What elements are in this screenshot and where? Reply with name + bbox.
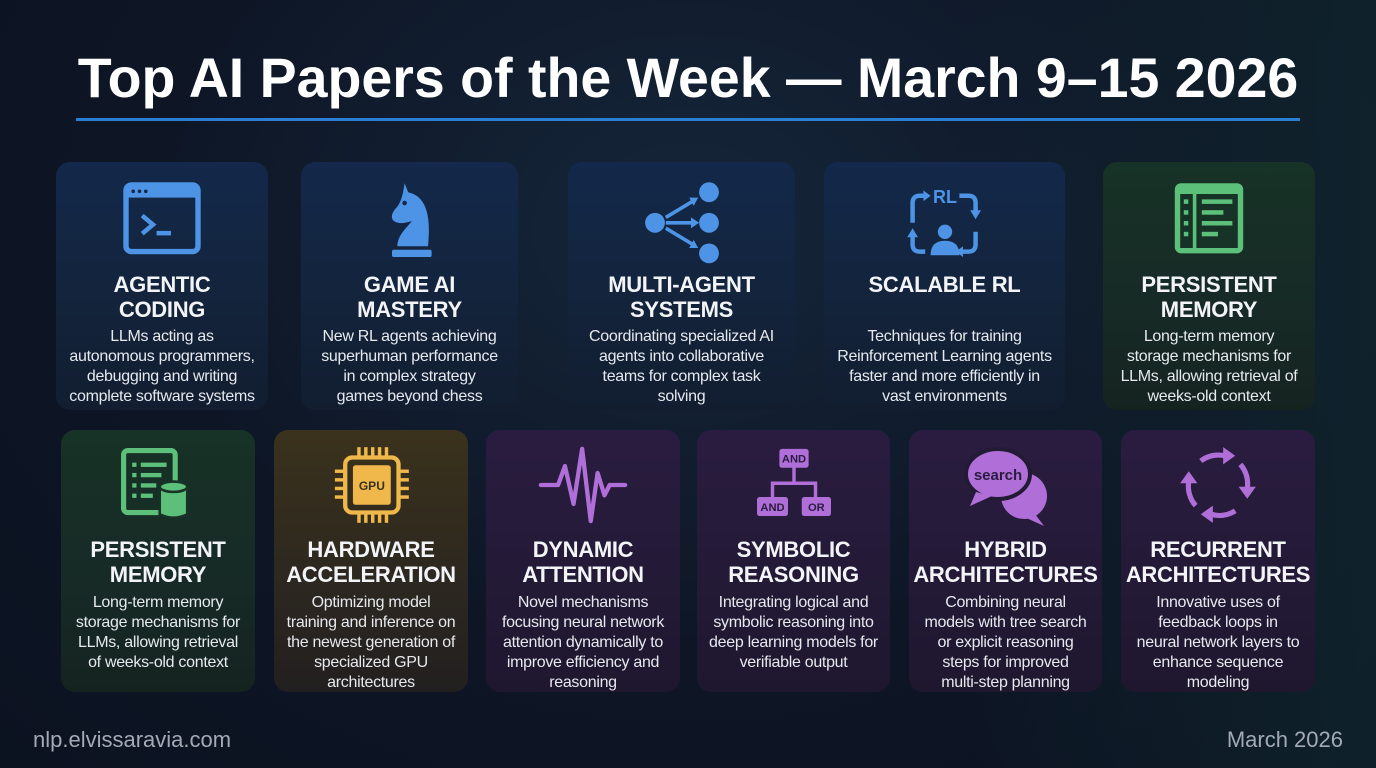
heading: AGENTIC [114, 272, 210, 297]
heading [522, 537, 644, 587]
text: Novel mechanisms [518, 594, 648, 611]
panel: game ai [301, 162, 518, 410]
heading: HYBRID [964, 537, 1047, 562]
text [1121, 328, 1298, 405]
heading: REASONING [728, 562, 859, 587]
panel: hybrid architectures [909, 430, 1102, 692]
footer: site: nlp.elvissaravia.com [33, 727, 231, 752]
heading: RECURRENT [1150, 537, 1286, 562]
text: complete software systems [69, 388, 255, 405]
icon: doc with database [121, 448, 186, 516]
heading [1141, 272, 1277, 322]
footer: date: March 2026 [1227, 727, 1343, 752]
text [286, 594, 456, 691]
title: Top AI Papers of the Week — March 9–15 2026 [78, 47, 1298, 109]
text: of weeks-old context [88, 654, 228, 671]
heading: ATTENTION [522, 562, 644, 587]
panel: persistent memory bottom [61, 430, 255, 692]
text: games beyond chess [337, 388, 482, 405]
text: faster and more efficiently in [849, 368, 1040, 385]
text: agents into collaborative [599, 348, 764, 365]
heading: SCALABLE RL [869, 272, 1020, 297]
panel: hardware acceleration [274, 430, 468, 692]
heading [357, 272, 462, 322]
heading [728, 537, 859, 587]
text: multi-step planning [941, 674, 1070, 691]
icon: logic tree: OR [807, 502, 824, 514]
text: Coordinating specialized AI [589, 328, 774, 345]
panel: persistent memory top [1103, 162, 1315, 410]
icon: cycle arrows [1180, 447, 1256, 523]
text: attention dynamically to [503, 634, 663, 651]
text: focusing neural network [502, 614, 664, 631]
panel: multi-agent [568, 162, 795, 410]
text [321, 328, 498, 405]
text [502, 594, 664, 691]
text: storage mechanisms for [76, 614, 240, 631]
heading [90, 537, 226, 587]
heading [114, 272, 210, 322]
text [589, 328, 774, 405]
heading: MEMORY [110, 562, 206, 587]
text: Techniques for training [867, 328, 1022, 345]
text: Integrating logical and [719, 594, 868, 611]
text: Long-term memory [93, 594, 223, 611]
text: weeks-old context [1148, 388, 1270, 405]
icon: document list [1174, 183, 1244, 254]
text: Reinforcement Learning agents [837, 348, 1052, 365]
text: modeling [1187, 674, 1249, 691]
text: the newest generation of [287, 634, 455, 651]
text: in complex strategy [343, 368, 476, 385]
icon: speech bubbles: search [973, 467, 1022, 484]
text: debugging and writing [87, 368, 237, 385]
text: solving [658, 388, 705, 405]
text [76, 594, 240, 671]
text: Innovative uses of [1156, 594, 1280, 611]
panel: scalable rl [824, 162, 1065, 410]
text: symbolic reasoning into [713, 614, 874, 631]
heading [608, 272, 755, 322]
text: storage mechanisms for [1127, 348, 1291, 365]
icon: terminal [123, 182, 201, 254]
text: vast environments [882, 388, 1007, 405]
heading: DYNAMIC [533, 537, 633, 562]
text: New RL agents achieving [323, 328, 496, 345]
text: models with tree search [924, 614, 1087, 631]
heading: PERSISTENT [1141, 272, 1277, 297]
heading [286, 537, 456, 587]
text: teams for complex task [603, 368, 760, 385]
text: feedback loops in [1158, 614, 1278, 631]
icon: logic tree: AND [781, 454, 806, 466]
text: LLMs acting as [110, 328, 214, 345]
heading: MASTERY [357, 297, 462, 322]
heading: ARCHITECTURES [1126, 562, 1310, 587]
panel: dynamic attention [486, 430, 680, 692]
heading: GAME AI [364, 272, 455, 297]
text [837, 328, 1052, 405]
text: Long-term memory [1144, 328, 1274, 345]
icon: logic tree [757, 448, 831, 516]
heading: ARCHITECTURES [913, 562, 1098, 587]
heading: HARDWARE [307, 537, 435, 562]
text: improve efficiency and [507, 654, 659, 671]
text: or explicit reasoning [938, 634, 1074, 651]
text: LLMs, allowing retrieval of [1121, 368, 1297, 385]
panel: symbolic reasoning [697, 430, 890, 692]
icon: RL cycle [907, 187, 981, 257]
heading [1126, 537, 1310, 587]
text: enhance sequence [1153, 654, 1283, 671]
panel: agentic coding [56, 162, 268, 410]
text [69, 328, 255, 405]
icon: GPU chip: GPU [359, 479, 385, 493]
heading: PERSISTENT [90, 537, 226, 562]
text: neural network layers to [1137, 634, 1299, 651]
text: superhuman performance [321, 348, 498, 365]
icon: speech bubbles [964, 447, 1047, 526]
text: Combining neural [945, 594, 1066, 611]
text [1137, 594, 1299, 691]
icon: waveform [538, 446, 628, 524]
heading: CODING [119, 297, 205, 322]
heading: SYSTEMS [630, 297, 733, 322]
text [924, 594, 1087, 691]
panel: recurrent architectures [1121, 430, 1315, 692]
icon: chess knight [392, 183, 432, 257]
text: steps for improved [942, 654, 1069, 671]
icon: GPU chip [334, 447, 409, 523]
text: training and inference on [287, 614, 455, 631]
heading: ACCELERATION [286, 562, 456, 587]
text: autonomous programmers, [69, 348, 255, 365]
heading: MULTI-AGENT [608, 272, 755, 297]
text: deep learning models for [709, 634, 878, 651]
text: verifiable output [740, 654, 847, 671]
text: Optimizing model [312, 594, 430, 611]
text: architectures [327, 674, 415, 691]
text: reasoning [549, 674, 617, 691]
heading: MEMORY [1161, 297, 1257, 322]
heading: SYMBOLIC [737, 537, 850, 562]
icon: RL cycle: RL [933, 187, 957, 207]
icon: network [645, 182, 719, 264]
text: LLMs, allowing retrieval [78, 634, 238, 651]
text [709, 594, 878, 671]
heading [913, 537, 1098, 587]
text: specialized GPU [314, 654, 428, 671]
icon: logic tree: AND [760, 502, 784, 514]
